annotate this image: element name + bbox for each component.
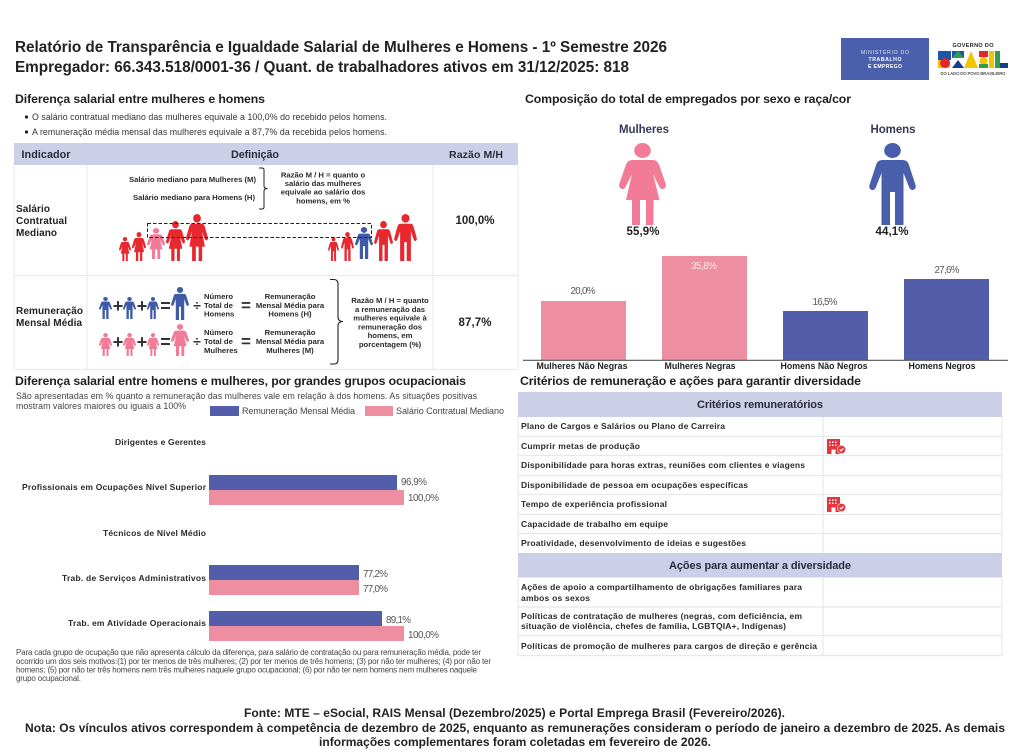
diagram: remuneração média: =: [241, 332, 251, 351]
bar chart: grupos: Técnicos de Nível Médio: [103, 528, 206, 538]
panel: critérios: [518, 374, 1002, 656]
table: critérios remuneratórios: Cumprir metas de produção: [521, 441, 640, 451]
diagram: remuneração média: +: [113, 332, 123, 352]
bar chart: raça/cor: Mulheres Não Negras: [536, 361, 628, 371]
table: critérios remuneratórios: Proatividade, desenvolvimento de ideias e sugestões: [521, 538, 746, 548]
table: ações para diversidade: situação de violência, chefes de família, LGBTQIA+, Indígenas): [521, 621, 786, 631]
table: indicadores: Mediano: [16, 228, 57, 239]
heading: critérios: Critérios de remuneração e ações para garantir diversidade: [520, 374, 861, 388]
diagram: remuneração média: [99, 280, 429, 364]
panel: composição: [523, 92, 1008, 371]
bar chart: grupos: 89,1%: [386, 615, 411, 626]
diagram: remuneração média: Mulheres (M): [266, 346, 314, 355]
logo: Ministério do Trabalho e Emprego: [841, 38, 929, 80]
diagram: remuneração média: homens, em: [368, 331, 413, 340]
bar chart: grupos: [22, 437, 439, 641]
icon: homens: Homens: [870, 124, 916, 136]
diagram: remuneração média: +: [137, 332, 147, 352]
legend: Salário Contratual Mediano: [396, 406, 504, 416]
title: Empregador: 66.343.518/0001-36 / Quant. de trabalhadores ativos em 31/12/2025: 818: [15, 59, 629, 76]
diagram: remuneração média: Número: [204, 328, 233, 337]
panel: grupos ocupacionais: [15, 374, 504, 683]
title: Relatório de Transparência e Igualdade Salarial de Mulheres e Homens - 1º Semestre 2026: [15, 39, 667, 56]
text block: nota de rodapé: Para cada grupo de ocupação que não apresenta cálculo da diferença, para salário de contratação ou para remuneração média, pode ter: [16, 648, 481, 657]
diagram: salário mediano: Razão M / H = quanto o: [281, 170, 365, 180]
bar chart: grupos: 100,0%: [408, 630, 439, 641]
diagram: remuneração média: a remuneração das: [355, 305, 425, 314]
table: critérios remuneratórios: Capacidade de trabalho em equipe: [521, 519, 668, 529]
icon: mulheres: Mulheres: [619, 124, 669, 136]
diagram: remuneração média: =: [241, 296, 251, 315]
diagram: remuneração média: Remuneração: [265, 292, 316, 301]
text block: nota de rodapé: homens; (5) por não ter três homens nem três mulheres naquele grupo ocupacional; (6) por não ter nem homens nem mulheres naquele: [16, 666, 478, 674]
legend: [210, 406, 504, 416]
bar chart: raça/cor: 20,0%: [570, 286, 596, 297]
footer: fonte e nota: informações complementares foram coletadas em fevereiro de 2026.: [319, 735, 711, 749]
diagram: salário mediano: [119, 168, 417, 261]
text block: bullets: A remuneração média mensal das mulheres equivale a 87,7% da recebida pelos homens.: [32, 127, 387, 137]
footer: fonte e nota: Fonte: MTE – eSocial, RAIS Mensal (Dezembro/2025) e Portal Emprega Brasil (Fevereiro/2026).: [244, 706, 785, 720]
diagram: remuneração média: +: [113, 296, 123, 316]
bar chart: grupos: 77,0%: [363, 584, 388, 595]
diagram: remuneração média: =: [160, 296, 171, 316]
heading: diferença salarial: Diferença salarial entre mulheres e homens: [15, 92, 265, 106]
logo: Governo do Brasil: [938, 43, 1008, 76]
diagram: remuneração média: Total de: [204, 337, 234, 346]
diagram: remuneração média: Homens: [204, 310, 234, 318]
table: indicadores: Mensal Média: [16, 318, 82, 329]
table: critérios remuneratórios: Critérios remuneratórios: [697, 399, 823, 411]
logo: Governo do Brasil: GOVERNO DO: [952, 43, 994, 49]
diagram: remuneração média: Mulheres: [204, 346, 238, 355]
title: [15, 39, 667, 76]
diagram: remuneração média: Homens (H): [268, 310, 312, 318]
text block: descrição: [16, 391, 478, 411]
diagram: remuneração média: mulheres equivale à: [353, 314, 427, 322]
bar chart: raça/cor: [523, 256, 1008, 371]
diagram: remuneração média: remuneração dos: [358, 322, 422, 332]
footer: fonte e nota: [25, 706, 1005, 749]
diagram: remuneração média: porcentagem (%): [359, 340, 422, 349]
table: ações para diversidade: Políticas de promoção de mulheres para cargos de direção e gerência: [521, 641, 817, 651]
icon: homens: [869, 124, 916, 238]
diagram: remuneração média: Mensal Média para: [256, 301, 325, 310]
icon: empresa com check: [827, 497, 846, 512]
table: indicadores: Indicador: [22, 149, 71, 161]
text block: bullets: [25, 112, 387, 137]
footer: fonte e nota: Nota: Os vínculos ativos correspondem à competência de dezembro de 2025, enquanto as remunerações consideram o período de janeiro a dezembro de 2025. As demais: [25, 721, 1005, 735]
table: indicadores: Remuneração: [16, 306, 83, 317]
icon: homens: 44,1%: [876, 226, 908, 238]
diagram: remuneração média: =: [160, 332, 171, 352]
diagram: remuneração média: Total de: [204, 301, 234, 310]
diagram: salário mediano: salário das mulheres: [285, 179, 361, 188]
icon: empresa com check: [827, 439, 846, 454]
table: indicadores: 87,7%: [458, 317, 492, 329]
text block: nota de rodapé: ocorrido um dos seis motivos:(1) por ter menos de três mulheres; (2) por ter menos de três homens; (3) por não ter mulheres; (4) por não ter: [16, 657, 491, 666]
table: indicadores: 100,0%: [456, 215, 494, 227]
table: indicadores: Salário: [16, 204, 50, 215]
bar chart: grupos: 100,0%: [408, 493, 439, 504]
logo: Governo do Brasil: DO LADO DO POVO BRASILEIRO: [940, 71, 1006, 76]
diagram: salário mediano: Salário mediano para Mulheres (M): [129, 175, 256, 184]
table: indicadores: Contratual: [16, 216, 67, 227]
diagram: remuneração média: ÷: [193, 333, 201, 349]
table: ações para diversidade: ambos os sexos: [521, 593, 590, 603]
diagram: remuneração média: ÷: [193, 297, 201, 313]
text block: nota de rodapé: grupo ocupacional.: [16, 674, 81, 683]
legend: Remuneração Mensal Média: [242, 406, 355, 416]
table: indicadores: Definição: [231, 149, 279, 161]
logo: Ministério do Trabalho e Emprego: MINISTÉRIO DO: [861, 49, 909, 56]
diagram: remuneração média: Razão M / H = quanto: [351, 296, 429, 305]
table: critérios remuneratórios: Disponibilidade de pessoa em ocupações específicas: [521, 480, 748, 490]
table: ações para diversidade: [518, 553, 1002, 656]
bar chart: raça/cor: Homens Negros: [908, 361, 976, 371]
text block: descrição: mostram valores maiores ou iguais a 100%: [16, 401, 186, 411]
table: critérios remuneratórios: Tempo de experiência profissional: [521, 499, 667, 509]
table: indicadores: Razão M/H: [449, 149, 503, 161]
bar chart: grupos: Dirigentes e Gerentes: [115, 437, 206, 447]
bar chart: grupos: 77,2%: [363, 569, 388, 580]
table: indicadores: [14, 143, 518, 370]
diagram: salário mediano: homens, em %: [296, 196, 350, 206]
logo: Ministério do Trabalho e Emprego: E EMPREGO: [868, 64, 902, 70]
bar chart: grupos: Profissionais em Ocupações Nível Superior: [22, 482, 207, 492]
diagram: salário mediano: equivale ao salário dos: [281, 188, 365, 196]
bar chart: grupos: Trab. de Serviços Administrativos: [62, 573, 206, 583]
diagram: remuneração média: Remuneração: [265, 328, 316, 337]
heading: composição: Composição do total de empregados por sexo e raça/cor: [525, 92, 851, 106]
bar chart: raça/cor: 27,6%: [934, 265, 960, 276]
logo: Ministério do Trabalho e Emprego: TRABALHO: [868, 57, 902, 63]
panel: diferença salarial: [14, 92, 518, 370]
diagram: salário mediano: Salário mediano para Homens (H): [133, 193, 255, 202]
diagram: remuneração média: Mensal Média para: [256, 337, 325, 346]
bar chart: raça/cor: Homens Não Negros: [780, 361, 868, 371]
table: critérios remuneratórios: [518, 392, 1002, 553]
table: critérios remuneratórios: Disponibilidade para horas extras, reuniões com clientes e viagens: [521, 460, 805, 470]
text block: descrição: São apresentadas em % quanto a remuneração das mulheres vale em relação à dos homens. As situações positivas: [16, 391, 478, 401]
bar chart: raça/cor: Mulheres Negras: [664, 361, 736, 371]
heading: grupos ocupacionais: Diferença salarial entre homens e mulheres, por grandes grupos ocupacionais: [15, 374, 466, 388]
table: ações para diversidade: Ações de apoio a compartilhamento de obrigações familiares para: [521, 582, 802, 592]
table: critérios remuneratórios: Plano de Cargos e Salários ou Plano de Carreira: [521, 421, 725, 431]
text block: bullets: O salário contratual mediano das mulheres equivale a 100,0% do recebido pelos homens.: [32, 112, 387, 122]
bar chart: grupos: Trab. em Atividade Operacionais: [68, 618, 206, 628]
bar chart: raça/cor: 16,5%: [812, 297, 838, 308]
table: ações para diversidade: Políticas de contratação de mulheres (negras, com deficiência, em: [521, 611, 802, 621]
text block: nota de rodapé: [16, 648, 491, 683]
table: ações para diversidade: Ações para aumentar a diversidade: [669, 560, 851, 572]
diagram: remuneração média: +: [137, 296, 147, 316]
diagram: remuneração média: Número: [204, 292, 233, 301]
bar chart: raça/cor: 35,8%: [691, 261, 717, 272]
bar chart: grupos: 96,9%: [401, 477, 427, 488]
icon: mulheres: 55,9%: [626, 226, 660, 238]
icon: mulheres: [619, 124, 669, 238]
